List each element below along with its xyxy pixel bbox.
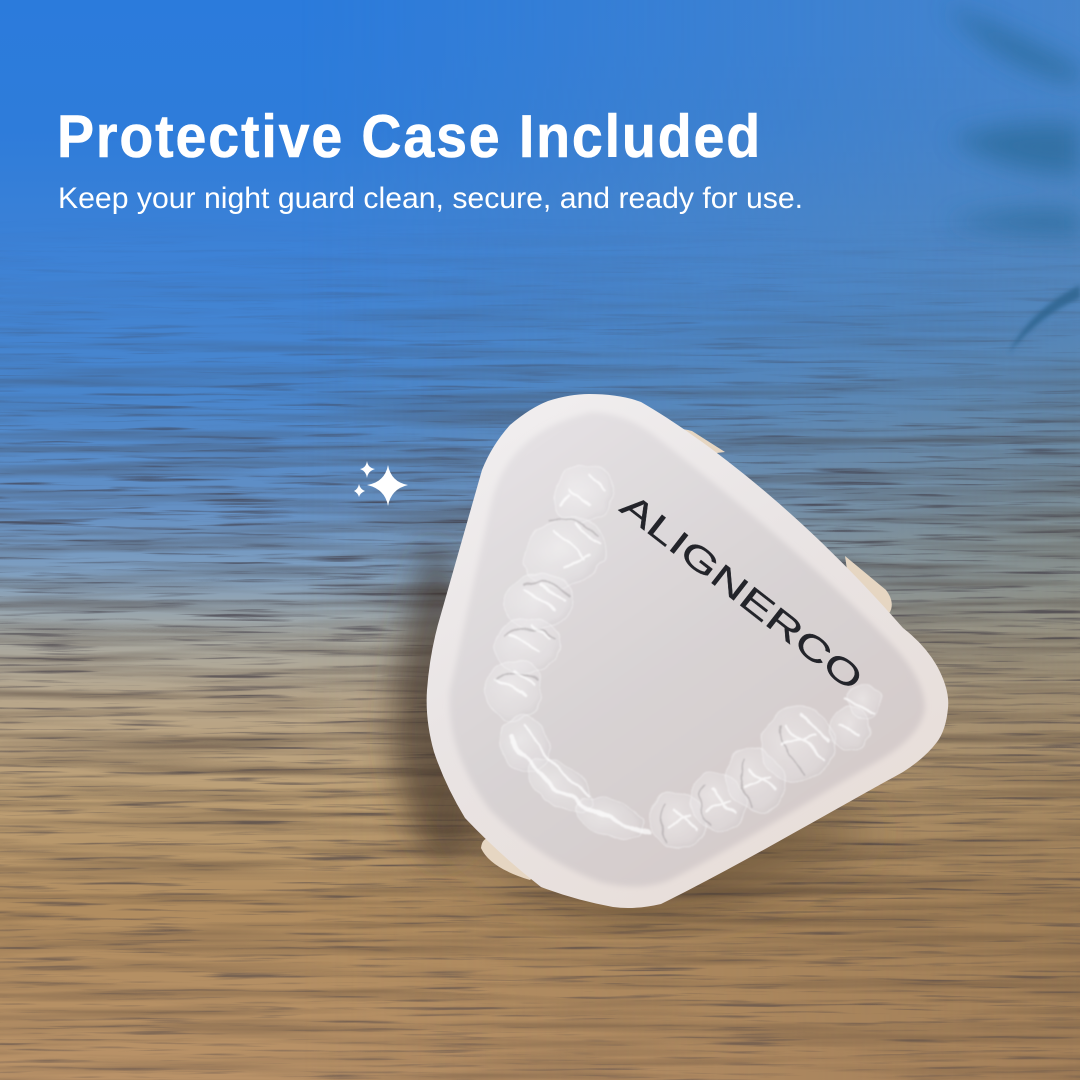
highlights [495, 475, 875, 832]
title: Protective Case Included [57, 103, 762, 170]
icon: sparkles [354, 461, 408, 506]
case inner panel [450, 412, 925, 887]
case body [427, 394, 948, 908]
tooth shadows [495, 519, 805, 842]
night guard [486, 454, 881, 856]
blurred palm leaf shadows [945, 5, 1080, 354]
protective case with night guard [427, 394, 948, 908]
brand logo: ALIGNERCO [613, 486, 870, 699]
teeth [486, 454, 881, 856]
case shadow [392, 540, 880, 925]
case hinge tabs [481, 429, 892, 880]
subtitle: Keep your night guard clean, secure, and ready for use. [58, 182, 803, 215]
